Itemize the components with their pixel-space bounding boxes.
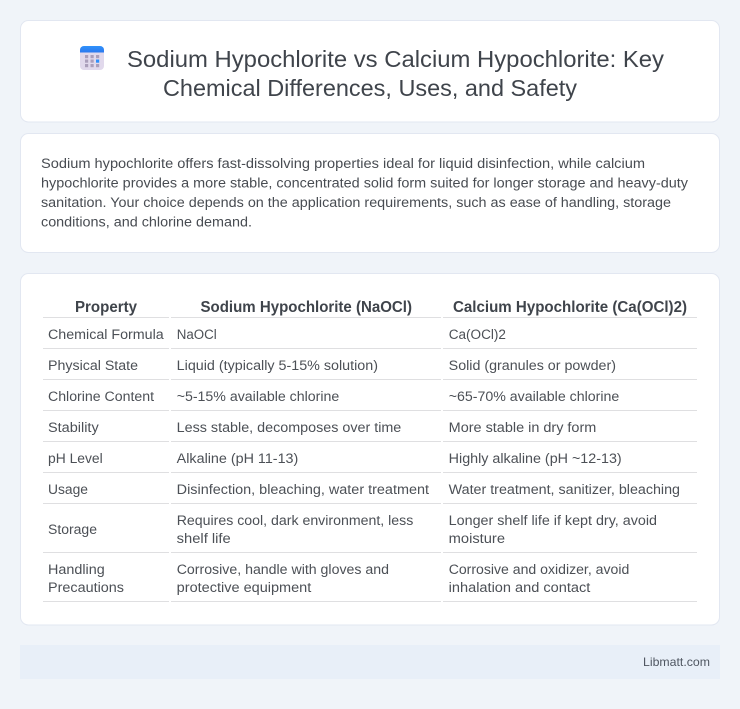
row: stability: Less stable, decomposes over time — [177, 420, 401, 436]
table header row: Property — [75, 299, 137, 316]
panel: comparison table — [20, 274, 720, 625]
row: stability — [43, 420, 697, 442]
text block: summary paragraph: conditions, and chlorine demand. — [41, 214, 252, 230]
title: Sodium Hypochlorite vs Calcium Hypochlorite: Key — [127, 46, 664, 72]
panel: header — [20, 20, 720, 122]
row: chlorine content: ~5-15% available chlorine — [177, 389, 339, 405]
panel: summary — [20, 134, 720, 252]
row: chemical formula: NaOCl — [177, 327, 217, 343]
table header row: Calcium Hypochlorite (Ca(OCl)2) — [453, 299, 687, 316]
row: usage — [43, 482, 697, 504]
row: physical state: Liquid (typically 5-15% solution) — [177, 358, 378, 374]
table header row — [43, 299, 697, 318]
text block: summary paragraph: sanitation. Your choice depends on the application requirements, such as ease of handling, storage — [41, 195, 671, 211]
row: pH level — [43, 451, 697, 473]
row: stability: Stability — [48, 420, 100, 436]
footer: Libmatt.com — [643, 655, 710, 669]
row: physical state: Solid (granules or powder) — [449, 358, 616, 374]
text block: summary paragraph: hypochlorite provides a more stable, concentrated solid form suited for longer storage and heavy-duty — [41, 176, 689, 192]
row: pH level: pH Level — [48, 451, 103, 467]
row: handling precautions — [43, 562, 697, 602]
title: Chemical Differences, Uses, and Safety — [163, 75, 577, 101]
text block: summary paragraph — [41, 156, 689, 230]
row: usage: Water treatment, sanitizer, bleaching — [449, 482, 680, 498]
row: usage: Disinfection, bleaching, water treatment — [177, 482, 429, 498]
row: storage: Storage — [48, 522, 97, 538]
footer — [20, 645, 720, 679]
row: storage: Longer shelf life if kept dry, avoid — [449, 513, 657, 529]
row: stability: More stable in dry form — [449, 420, 596, 436]
row: handling precautions: protective equipment — [177, 580, 311, 596]
row: handling precautions: Handling — [48, 562, 105, 578]
row: pH level: Highly alkaline (pH ~12-13) — [449, 451, 622, 467]
table header row: Sodium Hypochlorite (NaOCl) — [200, 299, 412, 316]
row: chlorine content: Chlorine Content — [48, 389, 154, 405]
row: chemical formula: Ca(OCl)2 — [449, 327, 506, 343]
row: chemical formula — [43, 327, 697, 349]
row: storage: Requires cool, dark environment, less — [177, 513, 413, 529]
row: handling precautions: Corrosive and oxidizer, avoid — [449, 562, 629, 578]
row: physical state — [43, 358, 697, 380]
icon: calendar — [80, 46, 104, 70]
row: chlorine content — [43, 389, 697, 411]
row: chlorine content: ~65-70% available chlorine — [449, 389, 619, 405]
row: pH level: Alkaline (pH 11-13) — [177, 451, 298, 467]
title — [127, 46, 664, 101]
row: storage — [43, 513, 697, 553]
row: handling precautions: Corrosive, handle with gloves and — [177, 562, 389, 578]
row: physical state: Physical State — [48, 358, 138, 374]
row: usage: Usage — [48, 482, 88, 498]
row: chemical formula: Chemical Formula — [48, 327, 164, 343]
row: storage: shelf life — [177, 531, 231, 547]
row: handling precautions: inhalation and contact — [449, 580, 590, 596]
text block: summary paragraph: Sodium hypochlorite offers fast-dissolving properties ideal for liquid disinfection, while calcium — [41, 156, 645, 172]
row: handling precautions: Precautions — [48, 580, 124, 596]
row: storage: moisture — [449, 531, 505, 547]
